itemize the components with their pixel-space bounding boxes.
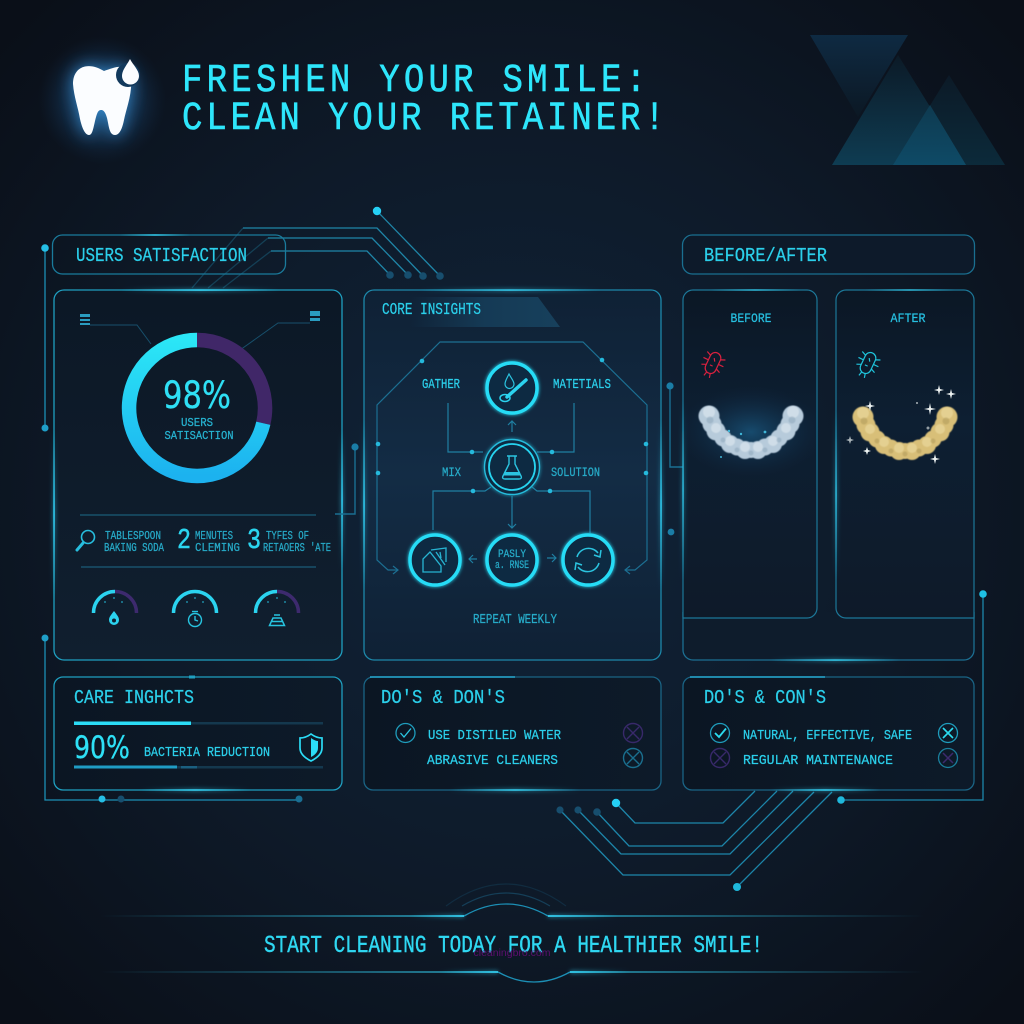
- flow labels: GATHER: [422, 378, 460, 393]
- title: FRESHEN YOUR SMILE:: [182, 59, 646, 104]
- icon: purple cross: [710, 748, 730, 768]
- icon: teal purple cross: [938, 748, 958, 768]
- outer circuit: [376, 342, 648, 574]
- progress bar top: [74, 722, 323, 725]
- card: before: BEFORE: [730, 311, 772, 326]
- node: scrub: [410, 535, 460, 585]
- icon: teal cross: [624, 748, 642, 768]
- header: users satisfaction: [52, 234, 286, 274]
- header: before/after: BEFORE/AFTER: [704, 245, 827, 267]
- gauge: layers: [256, 592, 298, 626]
- circuit lines: top: [192, 207, 444, 288]
- flow labels: MIX: [442, 465, 461, 480]
- heading: CORE INSIGHTS: [382, 300, 481, 319]
- node: gather materials: [487, 363, 537, 413]
- panel: care insights: [54, 676, 342, 791]
- sparkles: [846, 385, 956, 464]
- card: after: AFTER: [890, 311, 926, 326]
- image: yellow retainer: [852, 406, 958, 460]
- stats row: BAKING SODA: [104, 541, 165, 555]
- flow labels: REPEAT WEEKLY: [473, 613, 557, 628]
- donut label: SATISACTION: [164, 429, 234, 443]
- node: flask: [484, 440, 540, 494]
- divider lines: [80, 515, 316, 567]
- panel: do's and con's: [683, 677, 974, 791]
- icon: cyan bacteria: [852, 348, 883, 381]
- progress bar bottom: [74, 766, 323, 768]
- stat label: BACTERIA REDUCTION: [144, 745, 270, 761]
- panel: do's and don'ts: ABRASIVE CLEANERS: [427, 753, 558, 769]
- stats row: MENUTES: [195, 529, 233, 543]
- node: rinse: PASLY: [498, 549, 526, 561]
- stats row: TYFES OF: [266, 529, 309, 543]
- header: users satisfaction: USERS SATISFACTION: [76, 245, 247, 267]
- card: after: [835, 289, 974, 618]
- panel: do's and don'ts: [364, 677, 661, 791]
- heading tab: [410, 297, 560, 327]
- inner connectors: [433, 403, 590, 563]
- icon: shield: [300, 734, 322, 761]
- node: rinse: a. RNSE: [495, 560, 529, 572]
- flow labels: MATETIALS: [553, 378, 611, 393]
- image: clear retainer: [679, 386, 823, 478]
- flow labels: [422, 378, 611, 628]
- panel: users satisfaction: [53, 289, 343, 660]
- title: CLEAN YOUR RETAINER!: [182, 97, 665, 142]
- footer call to action: START CLEANING TODAY FOR A HEALTHIER SMILE!: [264, 933, 763, 960]
- title: [182, 59, 665, 142]
- stat: 90%: 90%: [74, 730, 130, 766]
- icon: red bacteria: [697, 348, 728, 381]
- small callout markers: [80, 311, 320, 350]
- node: rinse: [487, 535, 537, 585]
- panel: before/after frame: [683, 612, 974, 661]
- panel: do's and con's: DO'S & CON'S: [704, 687, 826, 709]
- icon: purple cross: [624, 724, 642, 742]
- panel: do's and don'ts: DO'S & DON'S: [381, 687, 505, 709]
- card: before: [679, 289, 823, 618]
- stats row: TABLESPOON: [105, 529, 161, 543]
- panel: do's and don'ts: USE DISTILED WATER: [428, 728, 562, 744]
- icon: cyan cross: [938, 724, 958, 742]
- decorative triangles: [810, 35, 1005, 165]
- donut label: USERS: [181, 416, 213, 430]
- donut label: [163, 374, 234, 443]
- footer banner frame: [100, 884, 924, 982]
- header: before/after: [682, 235, 974, 274]
- stats row: 3: [247, 524, 261, 557]
- gauge: timer: [174, 592, 216, 626]
- donut label: 98%: [163, 374, 231, 417]
- panel: core insights: [363, 289, 662, 660]
- icon: check: [710, 724, 730, 742]
- icon: magnifier: [77, 530, 94, 550]
- stats row: 2: [177, 524, 191, 557]
- circuit lines: bottom right: [556, 590, 987, 891]
- icon: check: [396, 724, 415, 742]
- stats row: [104, 524, 331, 557]
- stats row: RETAOERS 'ATE: [263, 541, 331, 555]
- stats row: CLEMING: [195, 541, 240, 555]
- gauge: water: [94, 592, 136, 625]
- watermark: cleaningbro.com: [474, 948, 550, 959]
- flow labels: SOLUTION: [551, 465, 600, 480]
- small side connectors: [335, 382, 683, 535]
- circuit lines: left: [41, 244, 302, 802]
- panel: do's and con's: NATURAL, EFFECTIVE, SAFE: [743, 728, 912, 744]
- panel: do's and con's: REGULAR MAINTENANCE: [743, 753, 893, 769]
- node: repeat: [563, 535, 613, 585]
- donut chart: [129, 340, 265, 476]
- icon: tooth with droplet: [38, 36, 166, 164]
- panel: care insights: CARE INGHCTS: [74, 687, 194, 709]
